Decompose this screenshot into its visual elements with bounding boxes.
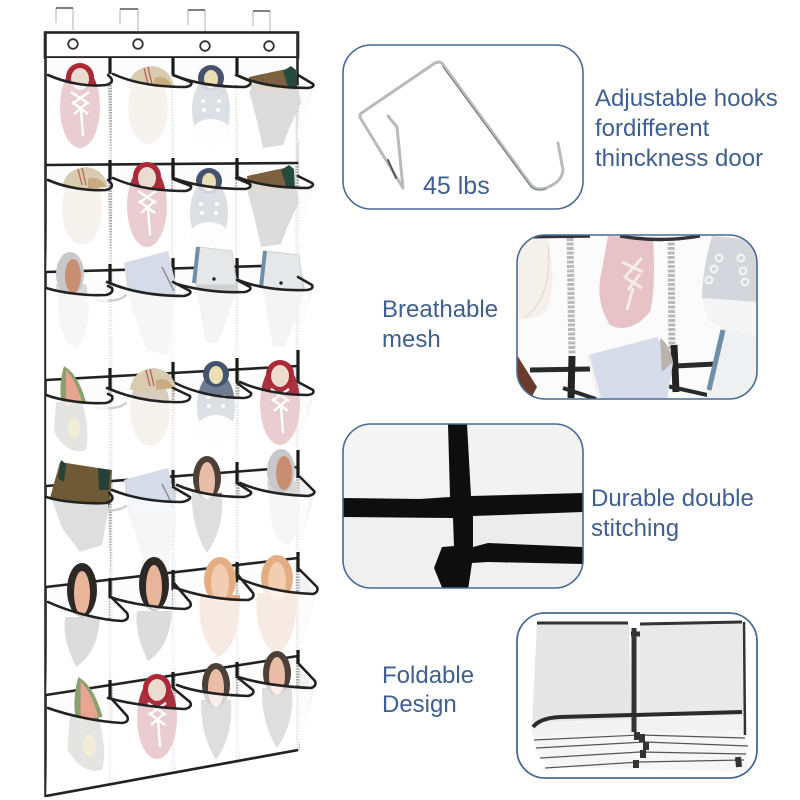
pocket: white sneaker [170,247,250,373]
row 2 of pockets [46,158,313,272]
weight label: 45 lbs [423,172,490,200]
panel: double stitching close-up [343,424,583,590]
pocket: black patterned flat [46,563,128,695]
pocket: red sneaker [48,63,112,165]
pocket: red sneaker [111,162,191,270]
pocket: navy sneaker [173,65,250,165]
black edge bindings [537,622,742,624]
white sneaker with blue trim [707,328,757,400]
pocket: navy sneaker [173,361,251,476]
mesh stitching [570,238,672,355]
door hooks [56,8,270,33]
pocket: gray loafer [237,449,314,565]
text: foldable design: Foldable [382,662,474,689]
row 1 of pockets [48,58,313,165]
pocket: dark flat [173,456,251,572]
pocket: black patterned flat [110,557,191,685]
pocket: brown boot [46,460,126,587]
pocket: peach flat [237,555,318,665]
pocket: light blue sneaker [107,251,190,376]
hanging band with rings [45,32,298,58]
panel: adjustable hook [343,45,583,209]
pocket: gray loafer [46,252,126,380]
panel: breathable mesh close-up [515,235,757,400]
text: adjustable hooks: Adjustable hooks [595,85,778,112]
organizer backing [46,58,297,796]
bottom hem [46,750,298,796]
row 6 of pockets [46,552,318,695]
pocket: red sneaker [237,360,313,472]
pocket: dark flat [237,651,316,761]
light blue sneaker [588,337,673,400]
pocket: light blue sneaker [111,468,190,580]
pocket: navy sneaker [173,168,250,268]
pocket: red sneaker [108,674,191,784]
pocket: floral flat [46,677,128,796]
icon: metal door hook [360,62,563,190]
row 4 of pockets [46,350,313,486]
row 3 of pockets [46,247,312,380]
pocket: brown boot [237,66,313,165]
pocket: peach flat [173,557,253,675]
text: breathable mesh: Breathable [382,296,498,323]
text: adjustable hooks: thinckness door [595,145,763,172]
text: double stitching: Durable double [591,485,754,512]
column stitching [110,85,298,784]
pocket: dark flat [173,663,253,773]
folded layers [534,735,748,768]
pocket: beige sneaker [46,167,112,272]
pocket: white sneaker [237,251,312,369]
gray sneaker through mesh [702,236,757,302]
panel: foldable design [517,613,757,778]
brown shoe edge [518,356,537,396]
text: breathable mesh: mesh [382,326,441,353]
text: foldable design: Design [382,691,457,718]
text: double stitching: stitching [591,515,679,542]
folded mesh fabric [532,623,632,722]
top pocket rims [517,236,700,240]
row 7 of pockets [46,650,316,796]
black straps [530,364,715,370]
pocket: floral flat [46,366,126,486]
row 5 of pockets [46,449,314,587]
shoe organizer [45,8,318,797]
text: adjustable hooks: fordifferent [595,115,710,142]
black webbing straps [343,424,583,590]
pocket: brown boot [237,165,313,267]
pocket: beige sneaker [107,368,190,481]
pocket: beige sneaker [111,66,191,165]
pink sneaker through mesh [599,236,654,328]
white sneaker through mesh [515,238,552,319]
side rail [45,32,298,797]
